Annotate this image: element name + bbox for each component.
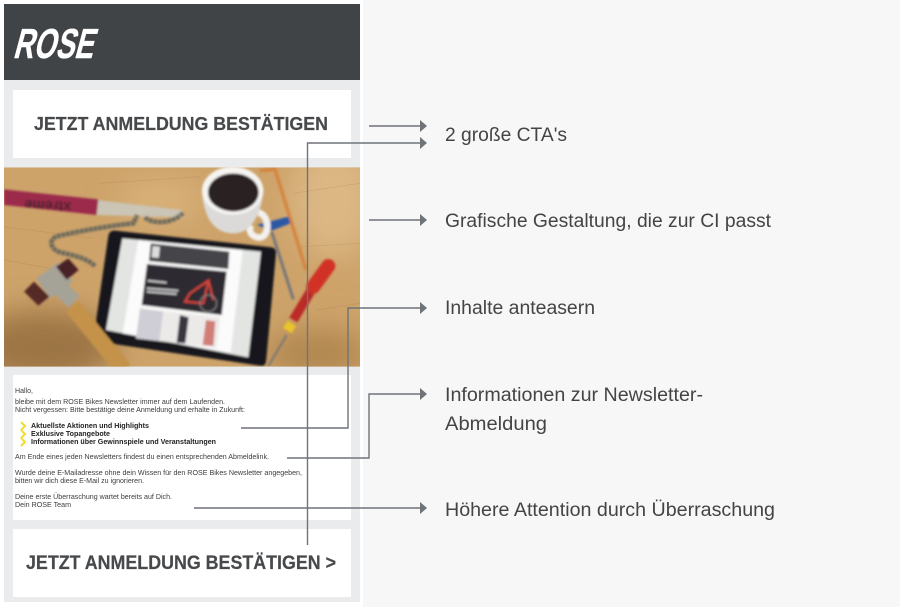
closing text: Dein ROSE Team bbox=[15, 502, 71, 509]
annotation: unsubscribe information: Abmeldung bbox=[445, 414, 547, 435]
arrow: surprise bbox=[194, 502, 427, 514]
arrow: teaser content bbox=[241, 302, 427, 428]
photo: tablet on workbench with tools bbox=[4, 167, 360, 367]
bullet list with yellow chevrons bbox=[21, 422, 216, 446]
newsletter on tablet: hero bbox=[142, 264, 227, 315]
bullet list with yellow chevrons: Aktuellste Aktionen und Highlights bbox=[31, 423, 149, 430]
photo shading bbox=[4, 167, 360, 367]
tool: orange hex key bbox=[260, 169, 306, 270]
notice text: Wurde deine E-Mailadresse ohne dein Wissen für den ROSE Bikes Newsletter angegeben, bbox=[15, 470, 302, 477]
bullet list with yellow chevrons: Informationen über Gewinnspiele und Veranstaltungen bbox=[31, 439, 216, 446]
arrow: unsubscribe information bbox=[287, 388, 427, 458]
CTA button: bottom: JETZT ANMELDUNG BESTÄTIGEN > bbox=[26, 553, 336, 574]
background: right annotation area bbox=[363, 0, 900, 607]
tool: bike chain bbox=[51, 213, 183, 266]
intro text bbox=[15, 399, 245, 414]
newsletter on tablet: header bbox=[149, 243, 229, 269]
CTA button: top: JETZT ANMELDUNG BESTÄTIGEN bbox=[34, 114, 328, 134]
annotation: teaser content: Inhalte anteasern bbox=[445, 298, 595, 319]
annotation: unsubscribe information bbox=[445, 385, 703, 435]
closing text bbox=[15, 493, 172, 509]
annotation: graphic design: Grafische Gestaltung, die zur CI passt bbox=[445, 211, 772, 232]
hammer bbox=[24, 258, 124, 370]
email body text block bbox=[13, 375, 351, 520]
intro text: Nicht vergessen: Bitte bestätige deine Anmeldung und erhalte in Zukunft: bbox=[15, 407, 245, 414]
notice text bbox=[15, 470, 302, 485]
arrow: graphic design bbox=[369, 214, 427, 226]
CTA button: top bbox=[13, 90, 351, 158]
intro text: bleibe mit dem ROSE Bikes Newsletter immer auf dem Laufenden. bbox=[15, 399, 225, 406]
coffee mug bbox=[202, 167, 267, 238]
annotation: surprise: Höhere Attention durch Überraschung bbox=[445, 500, 775, 521]
annotation: 2 CTAs: 2 große CTA's bbox=[445, 125, 567, 146]
arrow: top CTA bbox=[369, 120, 427, 132]
bullet list with yellow chevrons: Exklusive Topangebote bbox=[31, 431, 110, 438]
wood grain bbox=[4, 176, 360, 310]
unsubscribe text: Am Ende eines jeden Newsletters findest du einen entsprechenden Abmeldelink. bbox=[15, 454, 269, 461]
screwdriver bbox=[268, 266, 328, 366]
newsletter on tablet: photos bbox=[136, 308, 220, 348]
annotation: unsubscribe information: Informationen zur Newsletter- bbox=[445, 385, 703, 406]
tool: xtreme chain whip: xtreme bbox=[24, 197, 71, 215]
arrow: bottom CTA bbox=[308, 137, 427, 545]
tool: blue hex wrench bbox=[257, 217, 293, 299]
tablet bbox=[94, 231, 276, 366]
panel: newsletter frame bbox=[4, 80, 360, 602]
notice text: bitten wir dich diese E-Mail zu ignorieren. bbox=[15, 478, 144, 485]
header: ROSE logo bar bbox=[4, 4, 360, 80]
logo: ROSE: ROSE bbox=[10, 21, 103, 68]
closing text: Deine erste Überraschung wartet bereits auf Dich. bbox=[15, 493, 172, 501]
greeting: Hallo, bbox=[15, 388, 33, 395]
tool: xtreme chain whip bbox=[4, 189, 184, 217]
CTA button: bottom bbox=[13, 529, 351, 597]
